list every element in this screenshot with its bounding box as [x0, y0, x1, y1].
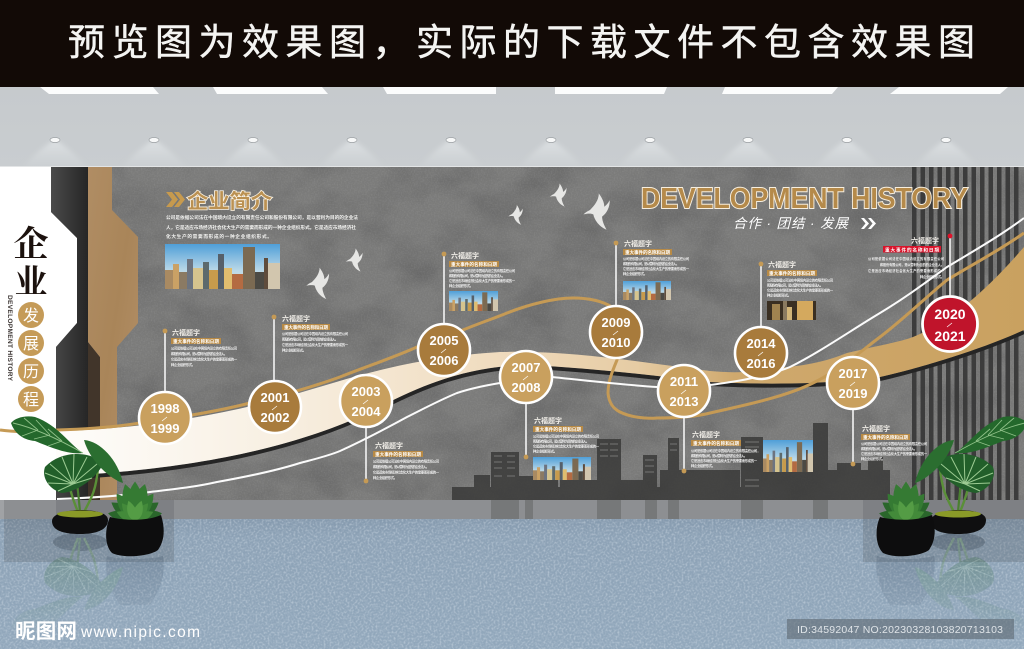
gold curve: [0, 233, 1024, 432]
year circle: 2001: [261, 390, 289, 405]
intro text: 公司是依据公司法在中国境内设立的有限责任公司和股份有限公司，是以营利为目的的企业法: [166, 214, 358, 221]
black pot: [877, 515, 935, 556]
copy: 六福题字: [172, 328, 200, 337]
year circle: [500, 351, 552, 403]
left plant: [11, 416, 164, 556]
low black pot: [931, 510, 986, 534]
main title: DEVELOPMENT HISTORY: [641, 183, 968, 215]
copy: [449, 251, 516, 288]
badge: 发展历程: 程: [23, 391, 39, 409]
milestone 2009: [590, 239, 690, 358]
copy: 公司是依据公司法在中国境内设立的有限责任公司: [691, 448, 757, 453]
badge: 发展历程: [18, 302, 44, 412]
watermark logo: www.nipic.com: [80, 624, 200, 641]
ceiling: [0, 87, 1024, 167]
milestone 1998: [139, 328, 238, 444]
heading: 企业: [13, 217, 49, 303]
right stripes: [912, 167, 1018, 500]
photo: [767, 301, 816, 320]
year circle: 2007: [512, 360, 540, 375]
watermark logo: [15, 620, 200, 643]
year circle: 2002: [261, 410, 289, 425]
copy: 公司是依据公司法在中国境内设立的有限责任公司: [373, 458, 439, 464]
copy: [282, 314, 349, 352]
copy: 种企业组织形式。: [861, 456, 885, 461]
year circle: 1998: [151, 401, 179, 416]
badge: 发展历程: 展: [23, 336, 39, 353]
copy: 种企业组织形式。: [449, 283, 473, 288]
year circle: 1999: [151, 421, 179, 436]
copy: [171, 328, 238, 367]
copy: 公司是依据公司法在中国境内设立的有限责任公司: [533, 434, 599, 438]
copy: 和股份有限公司，是以营利为目的的企业法人。: [171, 351, 227, 356]
copy: 和股份有限公司，是以营利为目的的企业法人。: [533, 438, 589, 444]
stem: [164, 331, 166, 392]
subtitle: 合作 · 团结 · 发展: [733, 216, 850, 231]
copy: 它是适应市场经济社会化大生产的需要而形成的一: [373, 470, 440, 474]
black pot: [106, 515, 164, 556]
image id label: [787, 619, 1014, 639]
year circle: [658, 365, 710, 417]
copy: 公司是依据公司法在中国境内设立的有限责任公司: [171, 346, 237, 350]
year circle: 2004: [352, 404, 381, 419]
copy: 种企业组织形式。: [691, 463, 715, 468]
image id label: ID:34592047 NO:20230328103820713103: [797, 624, 1003, 636]
milestone 2014: [735, 260, 834, 379]
copy: 它是适应市场经济社会化大生产的需要而形成的一: [533, 444, 600, 448]
year circle: [418, 324, 470, 376]
copy: 它是适应市场经济社会化大生产的需要而形成的一: [861, 451, 928, 456]
copy: 种企业组织形式。: [171, 362, 195, 367]
copy: 六福题字: [768, 260, 796, 269]
stem: [525, 400, 527, 457]
copy: 公司是依据公司法在中国境内设立的有限责任公司: [861, 441, 927, 446]
photo: [623, 281, 671, 300]
stem: [949, 236, 951, 298]
succulent: [107, 482, 163, 525]
copy: 六福题字: [624, 239, 652, 248]
year circle: [922, 296, 978, 352]
succulent: [878, 482, 934, 525]
milestone 2017: [827, 357, 928, 466]
year circle: [590, 306, 642, 358]
copy: [533, 416, 600, 454]
heading: 企业: 企: [13, 217, 49, 267]
copy: 重大事件的名称和日期: [284, 324, 328, 331]
year circle: 2006: [430, 353, 458, 368]
copy: 它是适应市场经济社会化大生产的需要而形成的一: [449, 278, 516, 283]
dark brown accent: [88, 342, 100, 500]
year circle: 2019: [839, 386, 867, 401]
copy: 它是适应市场经济社会化大生产的需要而形成的一: [691, 458, 758, 463]
copy: 种企业组织形式。: [533, 448, 557, 454]
copy: 和股份有限公司，是以营利为目的的企业法人。: [373, 464, 429, 469]
copy: 和股份有限公司，是以营利为目的的企业法人。: [623, 261, 679, 266]
copy: 重大事件的名称和日期: [375, 451, 421, 458]
copy: 公司是依据公司法在中国境内设立的有限责任公司: [767, 278, 833, 282]
copy: 公司是依据公司法在中国境内设立的有限责任公司: [868, 256, 944, 261]
copy: 六福题字: [375, 441, 403, 450]
year circle: 2010: [602, 335, 630, 350]
year circle: 2016: [747, 356, 775, 371]
icon: white chevrons: [861, 218, 876, 229]
wall reflection strip: [0, 500, 1024, 562]
photo: [763, 440, 813, 472]
city skyline silhouette: [452, 423, 890, 500]
stem: [615, 243, 617, 308]
intro block: [165, 189, 358, 289]
year circle: 2008: [512, 380, 540, 395]
copy: 重大事件的名称和日期: [693, 440, 739, 447]
birds: [306, 184, 610, 299]
stem: [760, 264, 762, 330]
copy: [767, 260, 834, 298]
left white column: [0, 167, 77, 500]
icon: chevrons: [166, 192, 185, 207]
stem: [365, 425, 367, 481]
year circle: 2003: [352, 384, 380, 399]
copy: 公司是依据公司法在中国境内设立的有限责任公司: [282, 331, 348, 336]
copy: 它是适应市场经济社会化大生产的需要而形成的一: [868, 268, 945, 273]
banner text: 预览图为效果图，实际的下载文件不包含效果图: [68, 22, 975, 63]
copy: 它是适应市场经济社会化大生产的需要而形成的一: [282, 342, 349, 347]
copy: 和股份有限公司，是以营利为目的的企业法人。: [880, 262, 944, 267]
copy: 重大事件的名称和日期: [451, 261, 497, 268]
copy: 和股份有限公司，是以营利为目的的企业法人。: [767, 282, 823, 288]
copy: 重大事件的名称和日期: [625, 249, 670, 256]
copy: 重大事件的名称和日期: [769, 270, 815, 277]
watermark logo: 昵图网: [15, 620, 77, 643]
copy: 和股份有限公司，是以营利为目的的企业法人。: [861, 446, 917, 451]
intro heading: 企业简介: [187, 189, 272, 213]
stem: [852, 408, 854, 464]
milestone 2001: [249, 314, 349, 433]
year circle: 2014: [747, 336, 776, 351]
copy: 六福题字: [862, 424, 890, 433]
copy: 公司是依据公司法在中国境内设立的有限责任公司: [449, 268, 515, 273]
year circle: [735, 327, 787, 379]
milestone 2011: [658, 365, 813, 473]
copy: [623, 239, 690, 276]
copy: 种企业组织形式。: [373, 475, 397, 480]
copy: [868, 236, 945, 279]
tan geometric column: [88, 167, 138, 500]
stem: [273, 317, 275, 382]
year circle: 2020: [934, 306, 966, 322]
milestone 2003: [340, 375, 440, 483]
copy: 六福题字: [534, 416, 562, 425]
timeline ribbon: [56, 247, 1024, 478]
floor: [0, 500, 1024, 649]
low black pot: [52, 510, 108, 534]
copy: 和股份有限公司，是以营利为目的的企业法人。: [691, 453, 747, 458]
year circle: 2011: [670, 374, 698, 389]
top banner: [0, 0, 1024, 87]
copy: 六福题字: [692, 430, 720, 439]
copy: 它是适应市场经济社会化大生产的需要而形成的一: [767, 288, 834, 292]
intro photo: [165, 244, 280, 289]
copy: 和股份有限公司，是以营利为目的的企业法人。: [282, 336, 338, 342]
heading: 企业: 业: [14, 256, 48, 303]
english vertical caption: DEVELOPMENT HISTORY: [6, 295, 13, 382]
right plant: [877, 416, 1024, 556]
badge: 发展历程: 历: [23, 364, 39, 381]
year circle: 2017: [839, 366, 867, 381]
year circle: 2013: [670, 394, 698, 409]
copy: 六福题字: [451, 251, 479, 260]
year circle: [249, 381, 301, 433]
year circle: 2021: [934, 328, 966, 344]
copy: 六福题字: [911, 236, 939, 245]
white curve: [57, 218, 1024, 499]
badge: 发展历程: 发: [23, 307, 39, 325]
milestone 2020: [868, 234, 978, 352]
copy: 重大事件的名称和日期: [535, 426, 581, 433]
copy: 和股份有限公司，是以营利为目的的企业法人。: [449, 273, 505, 278]
copy: 它是适应市场经济社会化大生产的需要而形成的一: [171, 356, 238, 362]
milestone 2005: [418, 251, 516, 376]
intro text: 化大生产的需要而形成的一种企业组织形式。: [166, 233, 272, 240]
copy: [691, 430, 758, 468]
year circle: [340, 375, 392, 427]
copy: 种企业组织形式。: [767, 292, 791, 298]
stem: [443, 254, 445, 326]
wall background: [0, 167, 1024, 500]
copy: [373, 441, 440, 480]
copy: 它是适应市场经济社会化大生产的需要而形成的一: [623, 266, 690, 271]
year circle: 2005: [430, 333, 458, 348]
milestone 2007: [500, 351, 600, 480]
dark geometric column: [51, 167, 88, 500]
copy: 种企业组织形式。: [282, 348, 306, 352]
plant reflections: [20, 534, 1020, 618]
copy: 种企业组织形式。: [920, 274, 944, 279]
year circle: 2009: [602, 315, 630, 330]
copy: 重大事件的名称和日期: [863, 434, 908, 441]
year circle: [827, 357, 879, 409]
photo: [449, 291, 498, 311]
stem: [683, 415, 685, 470]
copy: [861, 424, 928, 461]
copy: 六福题字: [282, 314, 310, 323]
copy: 公司是依据公司法在中国境内设立的有限责任公司: [623, 256, 689, 261]
vertical heading: [6, 217, 49, 412]
intro text: 人，它是适应市场经济社会化大生产的需要而形成的一种企业组织形式。它是适应市场经济社: [166, 224, 356, 231]
copy: 重大事件的名称和日期: [885, 246, 939, 254]
photo: [533, 457, 591, 480]
intro text: [166, 214, 358, 240]
copy: 重大事件的名称和日期: [173, 338, 219, 345]
copy: 种企业组织形式。: [623, 271, 647, 276]
year circle: [139, 392, 191, 444]
